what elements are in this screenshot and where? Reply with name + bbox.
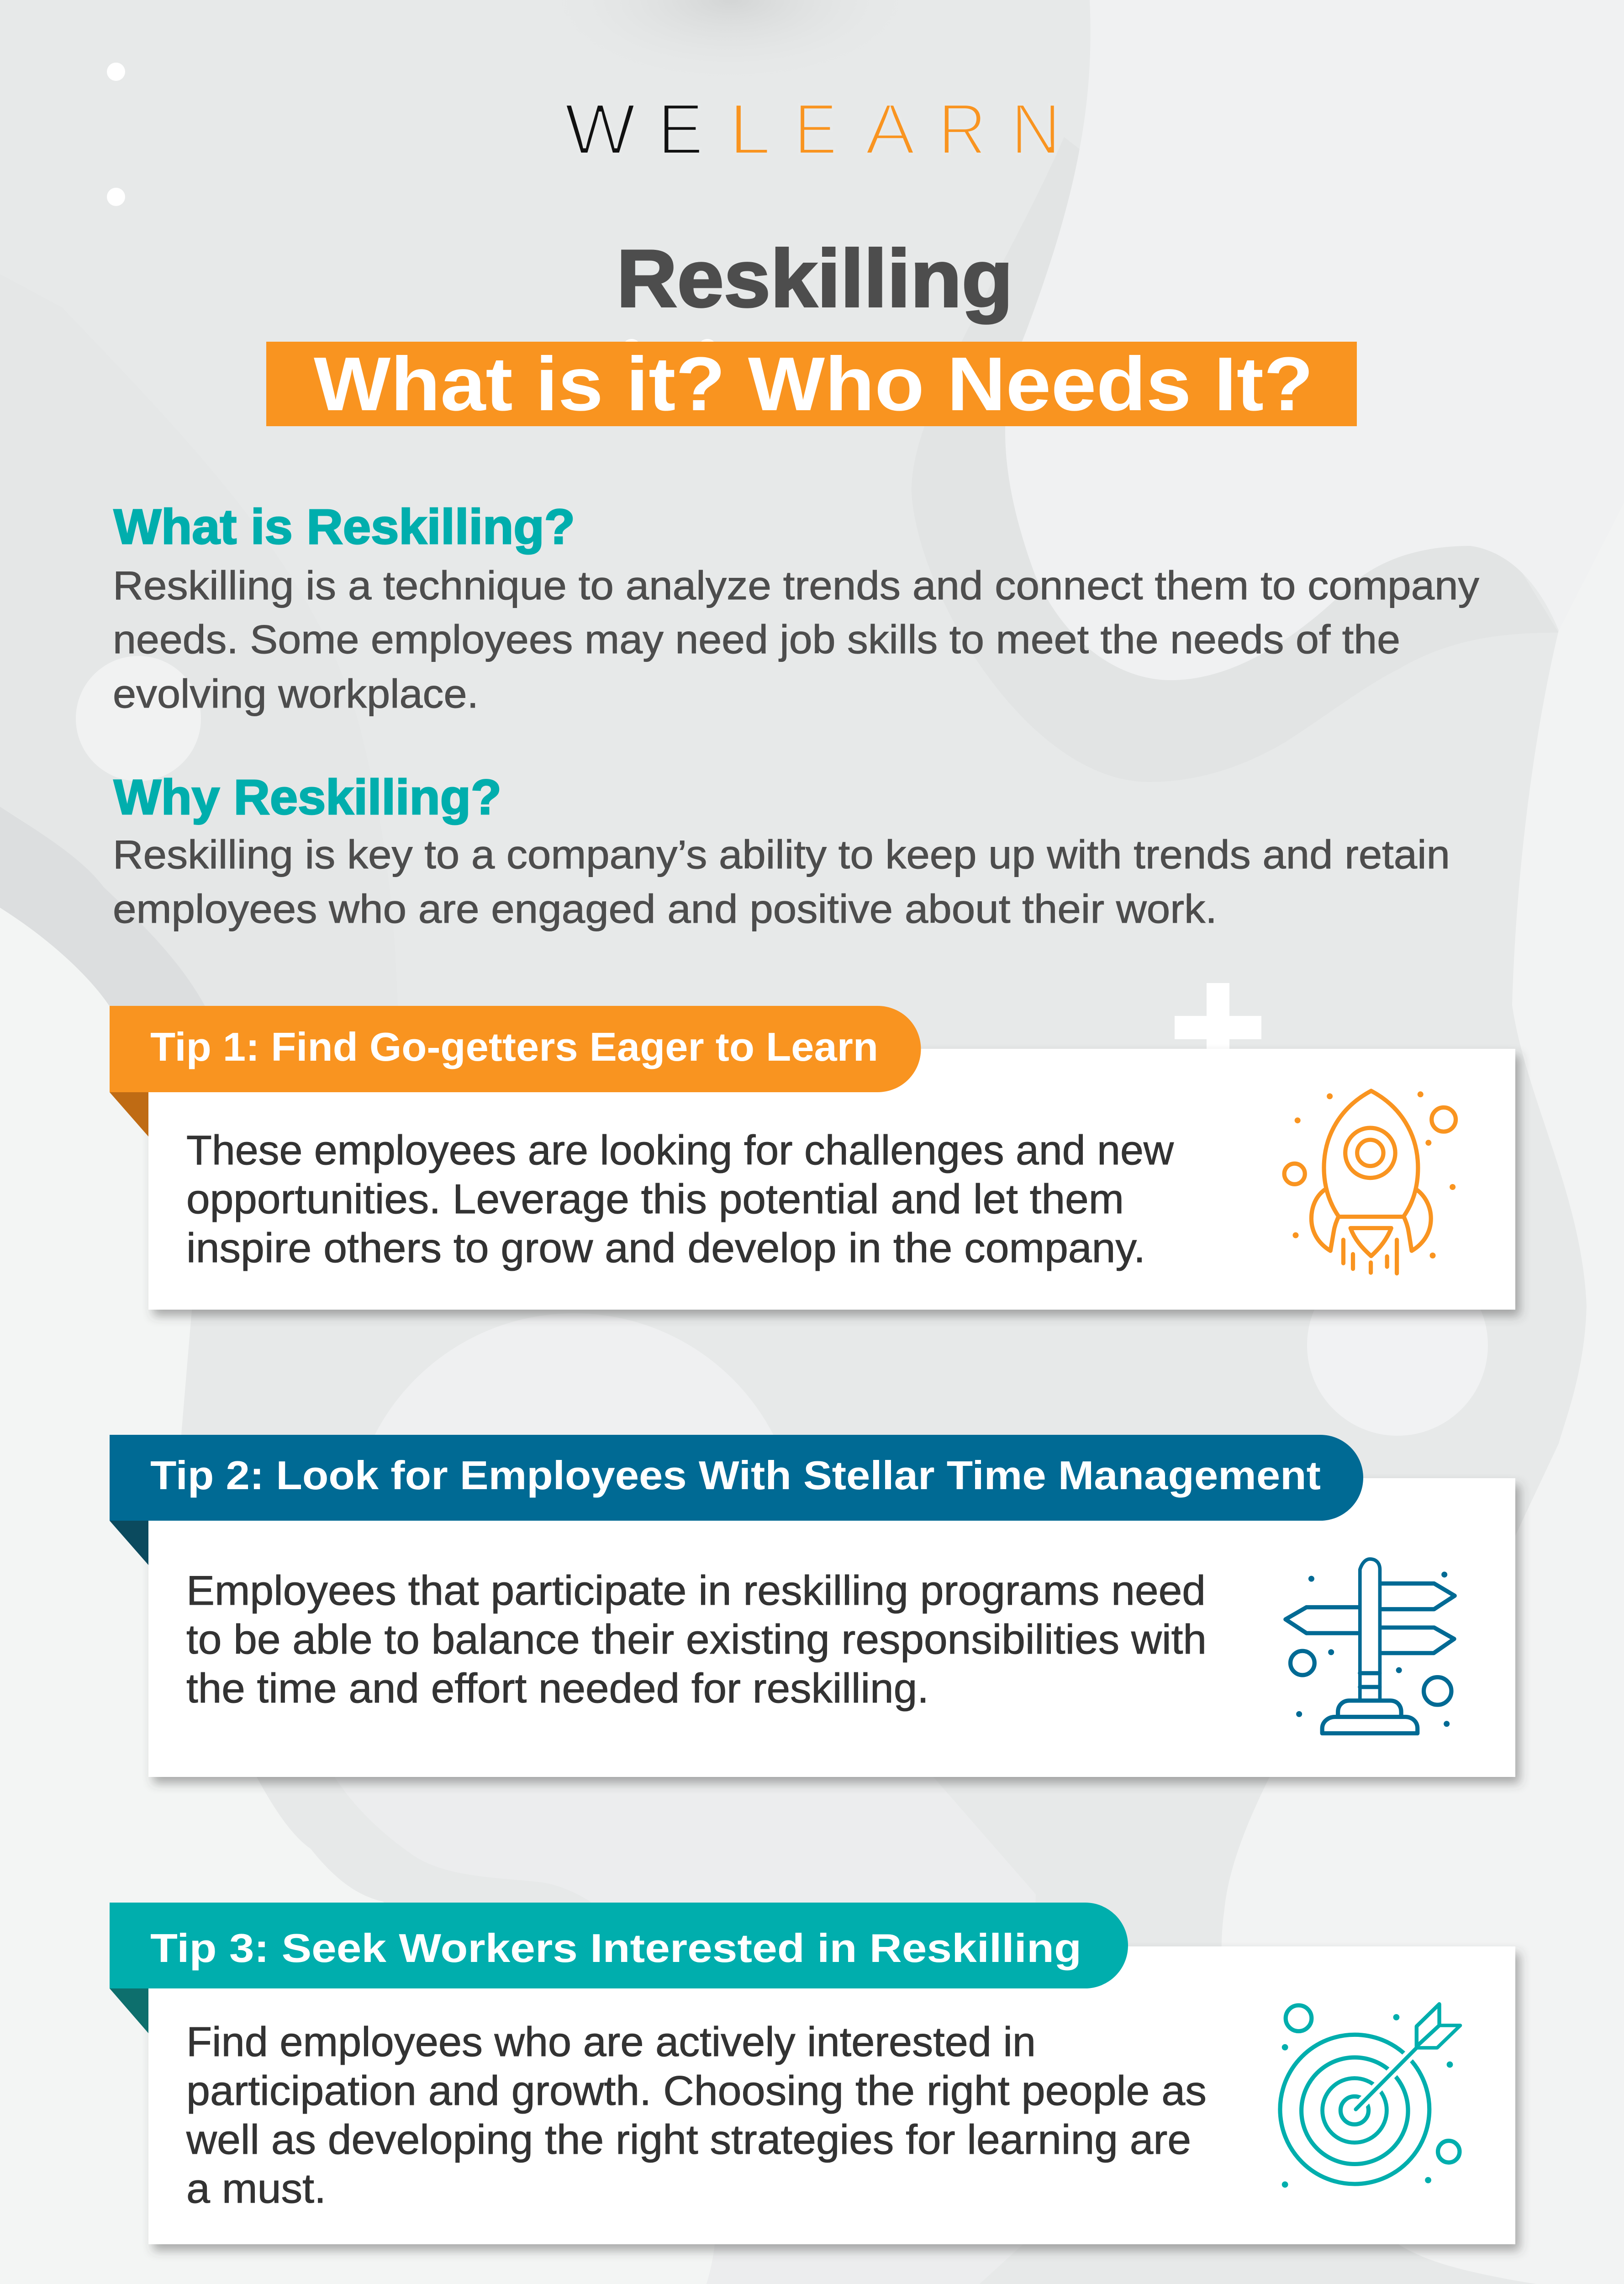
tip 3 banner: Tip 3: Seek Workers Interested in Reskilling	[150, 1925, 1081, 1971]
tip 1 body text: inspire others to grow and develop in the company.	[186, 1225, 1145, 1271]
tip 2 panel	[110, 1435, 1515, 1777]
tip 2 body text: to be able to balance their existing responsibilities with	[186, 1617, 1207, 1663]
logo: WE LEARN: N	[1011, 89, 1061, 169]
tip 2 ribbon fold	[110, 1521, 148, 1565]
tip 1 banner	[110, 1006, 921, 1092]
section: what is reskilling	[113, 499, 1479, 716]
subtitle banner: What is it? Who Needs It?	[314, 342, 1313, 427]
tip 3 body text: Find employees who are actively interested in	[186, 2019, 1036, 2065]
tip 3 body text: a must.	[186, 2166, 326, 2212]
tip 2 body text: the time and effort needed for reskilling.	[186, 1665, 929, 1712]
title: Reskilling	[617, 233, 1013, 324]
tip 3 panel	[110, 1903, 1515, 2244]
icon: signpost	[1286, 1559, 1455, 1733]
paragraph: what is reskilling	[113, 563, 1479, 716]
logo: WE LEARN: L	[729, 89, 771, 169]
tip 1 ribbon fold	[110, 1092, 148, 1137]
tip 1 panel	[110, 1006, 1515, 1310]
paragraph: why reskilling: Reskilling is key to a company’s ability to keep up with trends and retain	[113, 832, 1450, 877]
white dots behind title bar	[622, 339, 717, 357]
tip 2 card	[148, 1478, 1515, 1777]
tip 1 body text	[186, 1127, 1174, 1271]
paragraph: what is reskilling: needs. Some employees may need job skills to meet the needs of the	[113, 617, 1400, 662]
tip 3 body text: participation and growth. Choosing the right people as	[186, 2068, 1207, 2114]
paragraph: why reskilling	[113, 832, 1450, 931]
tip 3 body text	[186, 2019, 1207, 2212]
logo: WE LEARN: A	[865, 89, 916, 169]
heading: why reskilling: Why Reskilling?	[114, 769, 501, 825]
tip 3 banner	[110, 1903, 1128, 1988]
section: why reskilling	[113, 769, 1450, 931]
icon: rocket	[1284, 1091, 1456, 1274]
tip 1 banner: Tip 1: Find Go-getters Eager to Learn	[150, 1024, 878, 1069]
paragraph: why reskilling: employees who are engaged and positive about their work.	[113, 886, 1217, 931]
tip 1 body text: opportunities. Leverage this potential and let them	[186, 1176, 1124, 1222]
tip 2 banner	[110, 1435, 1363, 1521]
logo: WE LEARN: E	[658, 89, 703, 169]
heading: what is reskilling: What is Reskilling?	[114, 499, 575, 554]
logo: WE LEARN: W	[564, 89, 636, 169]
icon: target with arrow	[1280, 2004, 1461, 2188]
tip 2 banner: Tip 2: Look for Employees With Stellar Time Management	[150, 1453, 1321, 1498]
logo: WE LEARN: R	[938, 89, 986, 169]
tip 1 body text: These employees are looking for challenges and new	[186, 1127, 1174, 1174]
tip 1 card	[148, 1049, 1515, 1310]
tip 2 body text	[186, 1568, 1207, 1712]
white plus decoration	[1175, 983, 1261, 1051]
tip 3 card	[148, 1946, 1515, 2244]
paragraph: what is reskilling: evolving workplace.	[113, 671, 479, 716]
tip 3 ribbon fold	[110, 1988, 148, 2033]
logo: WE LEARN	[564, 89, 1061, 169]
tip 3 body text: well as developing the right strategies for learning are	[186, 2117, 1191, 2163]
tip 2 body text: Employees that participate in reskilling programs need	[186, 1568, 1206, 1614]
paragraph: what is reskilling: Reskilling is a technique to analyze trends and connect them to company	[113, 563, 1479, 608]
white dots top left	[107, 63, 125, 206]
logo: WE LEARN: E	[794, 89, 837, 169]
